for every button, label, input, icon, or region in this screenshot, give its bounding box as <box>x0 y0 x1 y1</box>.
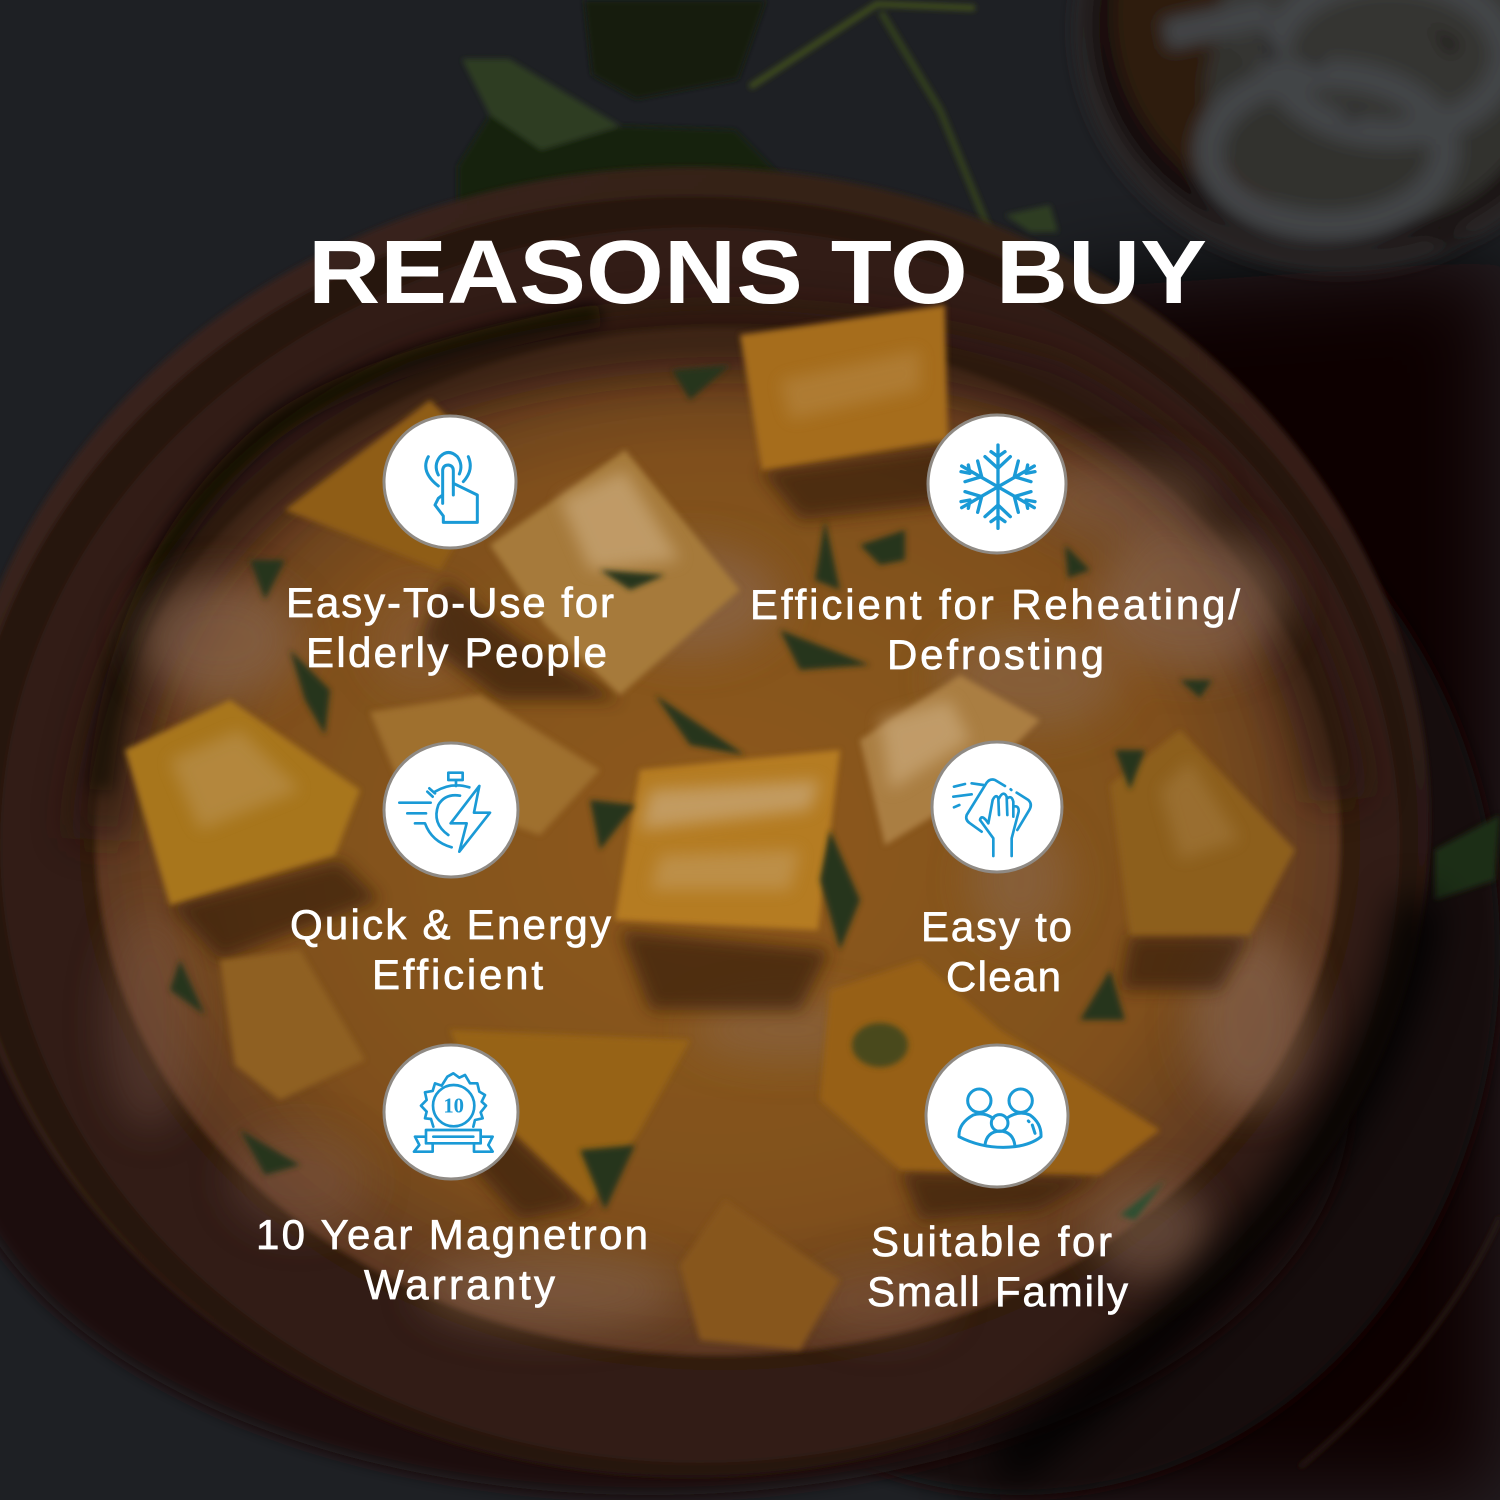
outer plate <box>882 601 1500 1498</box>
onion bowl <box>1075 0 1500 272</box>
feature: warranty <box>256 1045 648 1308</box>
label: Elderly People <box>306 629 607 676</box>
feature: small family <box>867 1045 1128 1315</box>
label: Small Family <box>867 1268 1128 1315</box>
label: Warranty <box>364 1261 555 1308</box>
label: Efficient for Reheating/ <box>750 581 1240 628</box>
label: 10 Year Magnetron <box>256 1211 648 1258</box>
label: Quick & Energy <box>290 901 611 948</box>
dark creases between cubes <box>170 445 1250 1220</box>
label <box>286 579 614 676</box>
paneer cubes <box>125 305 1295 1350</box>
paneer highlights <box>170 350 1240 890</box>
label <box>921 903 1072 1000</box>
shadow crescent outside rim <box>1000 900 1420 1470</box>
label: Easy-To-Use for <box>286 579 614 626</box>
feature: quick <box>290 743 611 998</box>
feature: reheating <box>750 415 1240 678</box>
label <box>256 1211 648 1308</box>
label <box>750 581 1240 678</box>
dark inner band <box>100 315 600 790</box>
rim shadow on curry <box>100 340 1340 840</box>
icon: touch hand <box>384 416 516 548</box>
feature: easy to clean <box>921 742 1072 1000</box>
icon: stopwatch bolt <box>384 743 518 877</box>
icon: 10 year badge: 10 <box>443 1096 464 1118</box>
lower bowl shadow <box>0 1056 900 1500</box>
feature: easy to use <box>286 416 614 676</box>
label: Easy to <box>921 903 1072 950</box>
label: Clean <box>946 953 1061 1000</box>
label: Efficient <box>372 951 543 998</box>
icon: 10 year badge <box>384 1045 518 1179</box>
label: Defrosting <box>887 631 1104 678</box>
dark table shadow <box>1000 260 1500 1500</box>
label <box>290 901 611 998</box>
icon: family <box>926 1045 1068 1187</box>
icon: wiping hand <box>932 742 1062 872</box>
icon: snowflake <box>928 415 1066 553</box>
title: REASONS TO BUY <box>308 223 1207 323</box>
herbs on curry <box>170 365 1500 1220</box>
herb sprig <box>458 0 1058 245</box>
label <box>867 1218 1128 1315</box>
label: Suitable for <box>871 1218 1112 1265</box>
curry cream patches <box>105 460 1310 1335</box>
